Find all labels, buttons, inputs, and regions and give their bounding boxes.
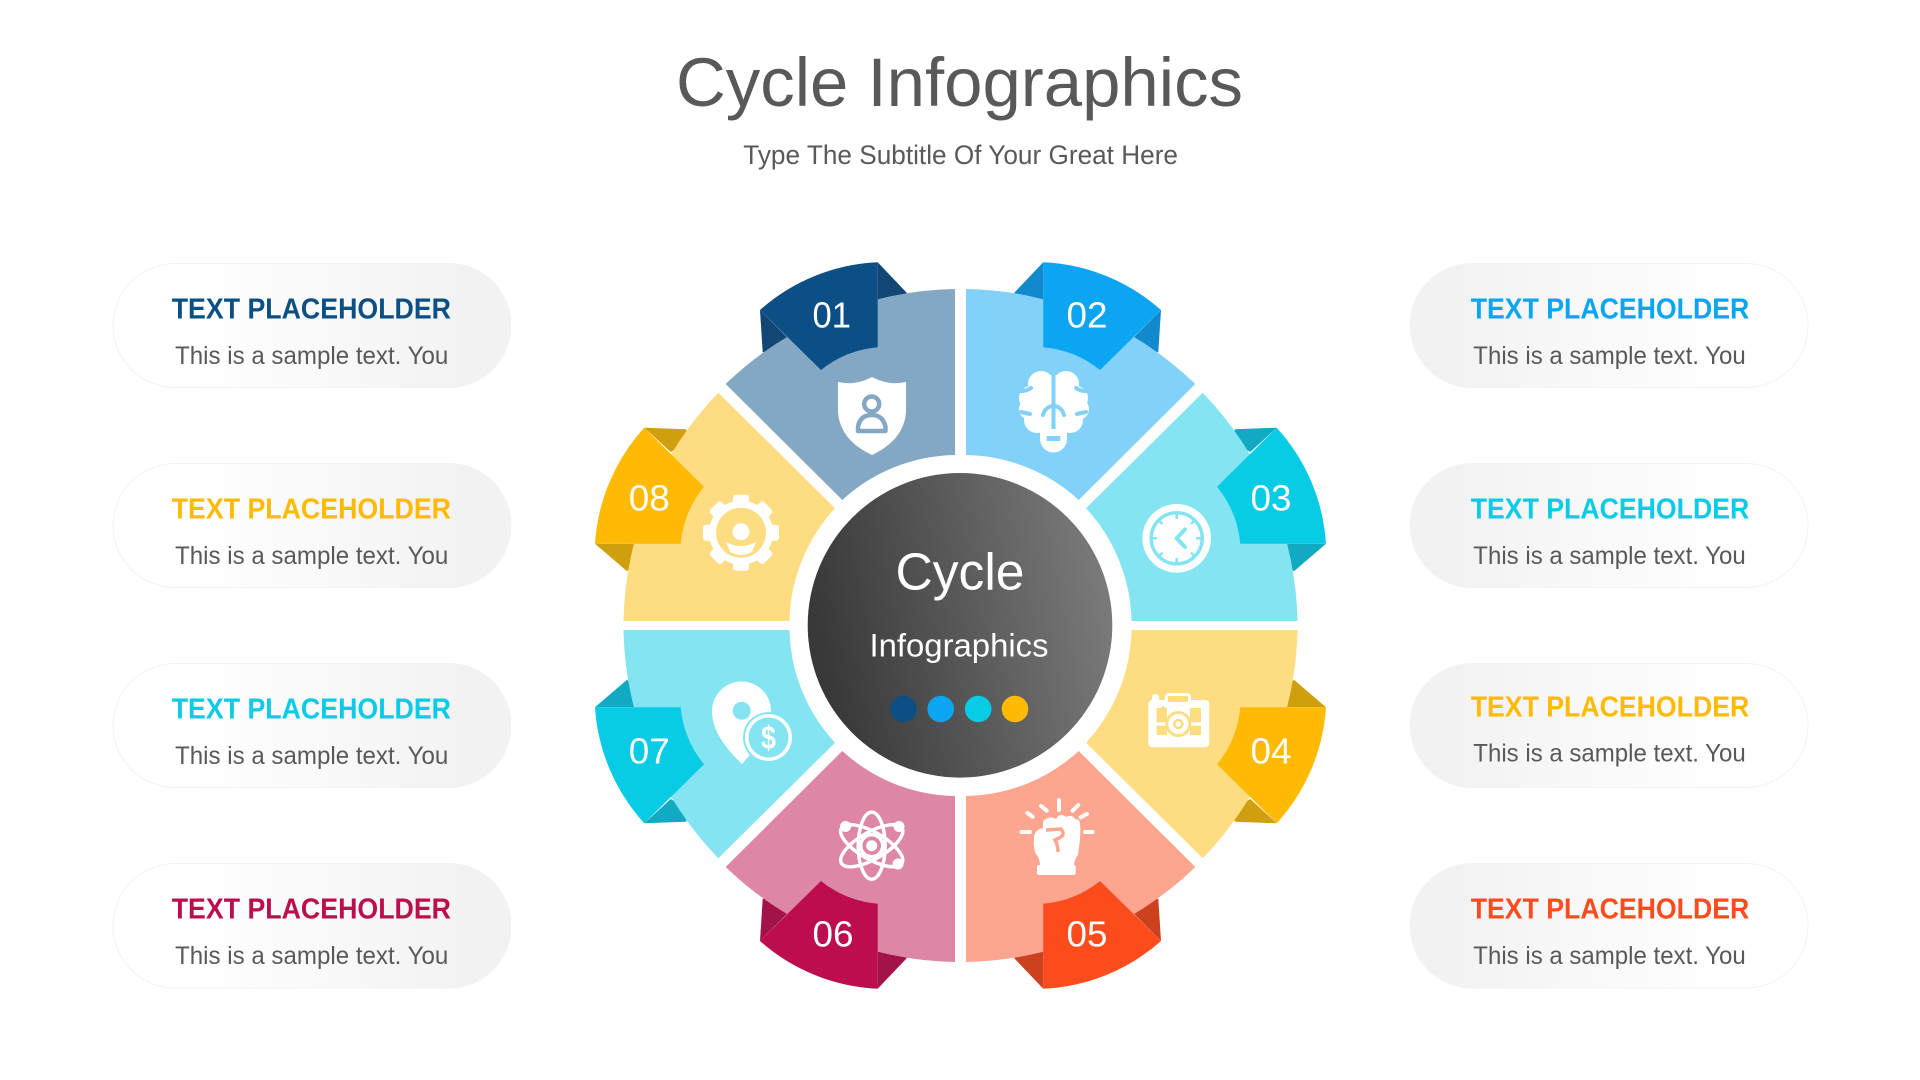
panel: cycle segment 02: 02 — [1066, 295, 1108, 336]
panel: right text pill 4: TEXT PLACEHOLDER — [1471, 893, 1749, 925]
panel: cycle segment 03 — [1086, 393, 1326, 621]
panel: right text pill 2: This is a sample text. You — [1473, 542, 1746, 570]
panel: right text pill 2: TEXT PLACEHOLDER — [1471, 493, 1749, 525]
hub colour dots — [890, 696, 1028, 722]
panel: cycle segment 07 — [595, 630, 835, 858]
panel: cycle segment 01: 01 — [812, 295, 851, 336]
panel: right text pill 1: This is a sample text. You — [1473, 342, 1746, 370]
panel: left text pill 4: TEXT PLACEHOLDER — [172, 893, 451, 925]
icon: raised fist — [1022, 800, 1092, 875]
panel: cycle segment 06: 06 — [812, 914, 854, 955]
icon: location pin with dollar coin: $ — [761, 720, 776, 756]
icon: camera — [1148, 694, 1209, 747]
panel: left text pill 3: TEXT PLACEHOLDER — [172, 693, 451, 725]
icon: brain bulb — [1019, 371, 1089, 453]
icon: shield with person — [838, 377, 906, 455]
panel: left text pill 2 — [113, 464, 511, 588]
panel: central hub: Infographics — [870, 628, 1048, 664]
title: Cycle Infographics — [676, 44, 1243, 121]
panel: cycle segment 07: 07 — [629, 730, 670, 771]
panel: cycle segment 03: 03 — [1250, 478, 1292, 519]
icon: location pin with dollar coin — [712, 682, 794, 764]
panel: cycle segment 02 — [966, 262, 1195, 500]
panel: cycle segment 08 — [595, 393, 835, 621]
panel: right text pill 3 — [1410, 664, 1808, 788]
panel: cycle segment 01 — [726, 262, 955, 500]
panel: cycle segment 04 — [1086, 630, 1326, 858]
panel: cycle segment 08: 08 — [629, 478, 670, 519]
panel: right text pill 4: This is a sample text. You — [1473, 942, 1746, 970]
panel: cycle segment 04: 04 — [1250, 730, 1292, 771]
panel: left text pill 1 — [113, 264, 511, 388]
panel: left text pill 2: This is a sample text. You — [175, 542, 448, 570]
icon: atom — [835, 812, 909, 879]
panel: left text pill 1: TEXT PLACEHOLDER — [172, 293, 451, 325]
panel: right text pill 1: TEXT PLACEHOLDER — [1471, 293, 1749, 325]
panel: central hub: Cycle — [896, 543, 1024, 601]
panel: right text pill 3: TEXT PLACEHOLDER — [1471, 692, 1749, 724]
panel: right text pill 3: This is a sample text. You — [1473, 740, 1746, 768]
panel: right text pill 2 — [1410, 464, 1808, 588]
panel: cycle segment 05 — [966, 751, 1195, 989]
panel: left text pill 3 — [113, 664, 511, 788]
panel: left text pill 1: This is a sample text. You — [175, 342, 448, 370]
panel: left text pill 4 — [113, 864, 511, 988]
panel: left text pill 2: TEXT PLACEHOLDER — [172, 493, 451, 525]
panel: right text pill 1 — [1410, 264, 1808, 388]
panel: left text pill 4: This is a sample text. You — [175, 942, 448, 970]
subtitle: Type The Subtitle Of Your Great Here — [743, 140, 1178, 170]
icon: gear with person — [703, 495, 779, 571]
panel: cycle segment 06 — [726, 751, 955, 989]
panel: cycle segment 05: 05 — [1066, 914, 1108, 955]
icon: clock — [1142, 504, 1211, 573]
panel: right text pill 4 — [1410, 864, 1808, 988]
panel: left text pill 3: This is a sample text. You — [175, 742, 448, 770]
panel: central hub — [808, 473, 1112, 778]
